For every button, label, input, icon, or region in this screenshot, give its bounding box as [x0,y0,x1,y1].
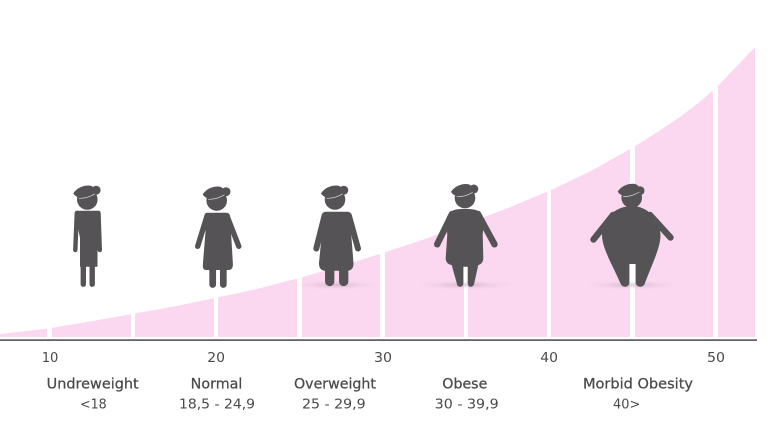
figure: obese [437,184,494,287]
category: normal: 18,5 - 24,9 [179,396,255,412]
axis line [0,339,757,341]
scale numbers [42,350,725,366]
rising pink area chart with vertical separators [0,47,755,340]
category: overweight [294,376,376,412]
scale numbers: 20 [207,350,225,366]
scale numbers: 10 [42,350,58,366]
category: obese [435,376,499,412]
category: morbid obesity [583,376,693,412]
category: morbid obesity: Morbid Obesity [583,376,693,392]
scale numbers: 30 [374,350,392,366]
category: normal: Normal [191,376,242,392]
category: morbid obesity: 40> [613,396,640,412]
figure: normal [198,186,239,284]
category: undreweight: Undreweight [47,376,139,392]
figure: overweight [316,186,358,282]
scale numbers: 50 [707,350,725,366]
figure: underweight [73,186,101,284]
category: overweight: 25 - 29,9 [302,396,366,412]
category: normal [179,376,255,412]
category: obese: 30 - 39,9 [435,396,499,412]
category: undreweight [47,376,139,412]
category: overweight: Overweight [294,376,376,392]
category: obese: Obese [442,376,487,392]
scale numbers: 40 [540,350,558,366]
category: undreweight: <18 [80,396,107,412]
figure: morbid obesity [594,184,670,287]
figure shadows [292,280,682,290]
